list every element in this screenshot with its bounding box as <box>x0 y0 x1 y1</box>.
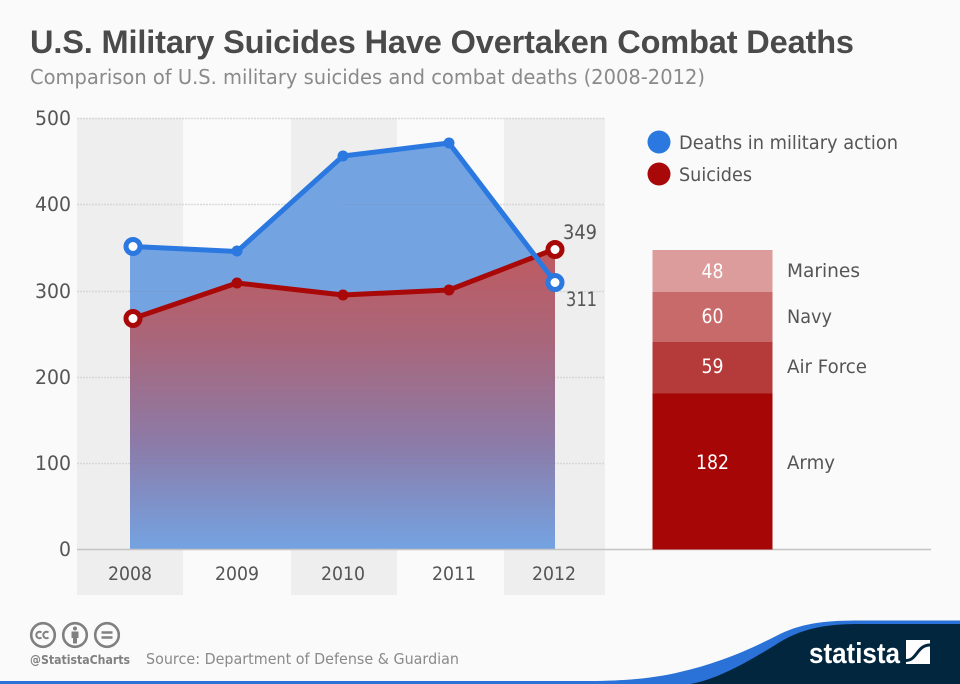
segment: air force <box>652 342 867 394</box>
social handle: @StatistaCharts <box>30 653 130 667</box>
y axis labels: 300 <box>35 280 71 303</box>
segment: air force: 59 <box>702 355 724 378</box>
value label: 349: 349 <box>563 221 597 244</box>
segment: marines: 48 <box>702 260 724 283</box>
alternating year bands <box>77 118 605 595</box>
segment: army: Army <box>787 452 835 474</box>
y axis gridlines <box>77 118 605 464</box>
segment: army <box>652 394 835 550</box>
y axis labels: 500 <box>35 107 71 130</box>
segment: marines <box>652 250 860 292</box>
icon: statista mark <box>906 640 930 664</box>
baseline axis <box>77 548 931 550</box>
stacked bar: suicides by branch <box>652 250 867 550</box>
segment: navy: 60 <box>702 305 724 328</box>
source: Source: Department of Defense & Guardian <box>146 650 459 668</box>
segment: air force: Air Force <box>787 356 867 378</box>
legend item: deaths in military action: Deaths in military action <box>679 132 898 154</box>
y axis labels: 100 <box>35 452 71 475</box>
value label: 311: 311 <box>566 288 597 311</box>
legend <box>648 130 898 186</box>
title: U.S. Military Suicides Have Overtaken Combat Deaths <box>30 24 854 60</box>
blue area: deaths in military action <box>130 143 555 549</box>
red gradient area: suicides <box>130 249 555 549</box>
legend item: suicides <box>648 162 752 186</box>
line chart <box>35 107 931 595</box>
x axis labels <box>108 563 576 585</box>
x axis labels: 2009 <box>215 563 259 585</box>
y axis labels: 0 <box>59 538 71 561</box>
segment: navy: Navy <box>787 306 832 328</box>
subtitle: Comparison of U.S. military suicides and combat deaths (2008-2012) <box>30 65 705 89</box>
statista logo: statista <box>809 638 901 670</box>
suicides line <box>126 242 562 326</box>
segment: navy <box>652 292 832 342</box>
legend item: suicides: Suicides <box>679 164 752 186</box>
segment: marines: Marines <box>787 260 860 282</box>
footer band with brand wave <box>0 620 960 684</box>
x axis labels: 2010 <box>321 563 365 585</box>
x axis labels: 2008 <box>108 563 152 585</box>
x axis labels: 2011 <box>432 563 476 585</box>
x axis labels: 2012 <box>532 563 576 585</box>
y axis labels: 200 <box>35 366 71 389</box>
icon: creative commons licence <box>31 623 119 647</box>
deaths in military action line <box>126 138 562 290</box>
y axis labels <box>35 107 71 561</box>
y axis labels: 400 <box>35 193 71 216</box>
gridlines faintly visible through the area <box>130 204 555 464</box>
segment: army: 182 <box>696 451 729 474</box>
